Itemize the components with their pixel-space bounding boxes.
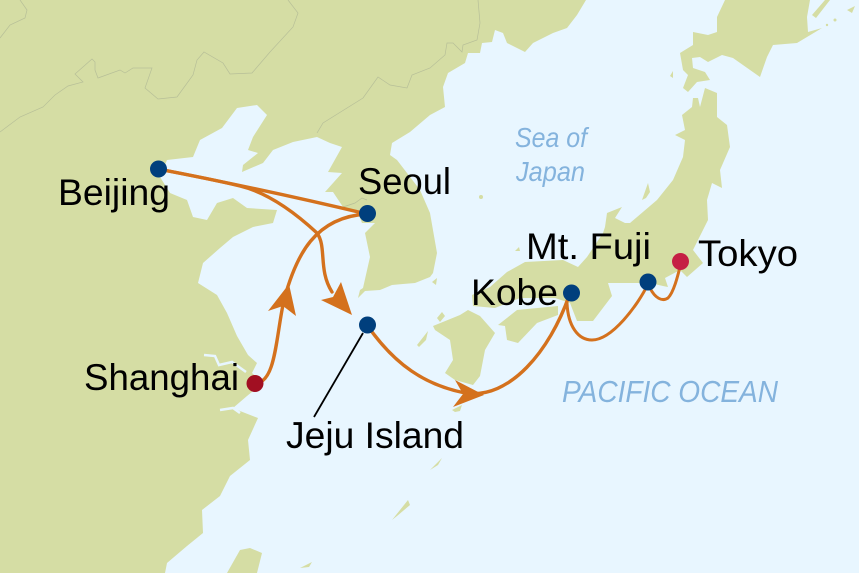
land: small islands: [300, 0, 855, 568]
label: Pacific Ocean: PACIFIC OCEAN: [562, 374, 779, 409]
land: Taiwan: [227, 548, 262, 573]
sea labels: [515, 122, 779, 409]
arrowhead: towards Jeju Island: [321, 282, 352, 315]
label: Jeju Island: Jeju Island: [286, 415, 464, 456]
label: Seoul: Seoul: [358, 161, 451, 202]
label: Shanghai: Shanghai: [84, 357, 239, 398]
label: Tokyo: Tokyo: [698, 233, 798, 274]
land: China, Korea and Russia mainland: [0, 0, 586, 573]
route: Beijing to Jeju Island: [158, 169, 332, 292]
route lines: [158, 169, 681, 394]
arrowhead: towards Seoul: [268, 284, 296, 316]
route: Shanghai to Seoul: [255, 214, 367, 383]
route: Mt. Fuji to Tokyo: [650, 263, 681, 300]
label: Kobe: Kobe: [471, 272, 558, 313]
route: Kobe to Mt. Fuji: [567, 284, 648, 340]
route: Beijing to Seoul: [158, 169, 367, 214]
label: Sea of: Sea of: [515, 122, 590, 153]
marker: Beijing: [150, 160, 167, 178]
land: Shikoku: [498, 306, 558, 343]
marker: Shanghai: [246, 375, 264, 392]
arrowhead: towards Kobe: [453, 380, 484, 407]
rivers near Shanghai: [204, 355, 246, 413]
marker: Mt. Fuji: [640, 274, 656, 290]
country borders: [0, 0, 480, 207]
label: Mt. Fuji: Mt. Fuji: [526, 226, 651, 267]
land: Honshu: [472, 88, 730, 321]
marker: Kobe: [563, 284, 580, 302]
route: Jeju Island to Kobe: [367, 296, 569, 394]
label: Japan: Japan: [515, 156, 585, 187]
land: Kyushu: [433, 310, 495, 385]
port labels: [58, 161, 798, 456]
marker: Tokyo: [672, 253, 689, 270]
marker: Jeju Island: [359, 316, 376, 334]
marker: Seoul: [359, 205, 376, 222]
leader line: Jeju Island: [314, 333, 363, 417]
port markers: [150, 160, 689, 392]
land: Hokkaido: [680, 0, 822, 92]
label: Beijing: Beijing: [58, 172, 170, 213]
